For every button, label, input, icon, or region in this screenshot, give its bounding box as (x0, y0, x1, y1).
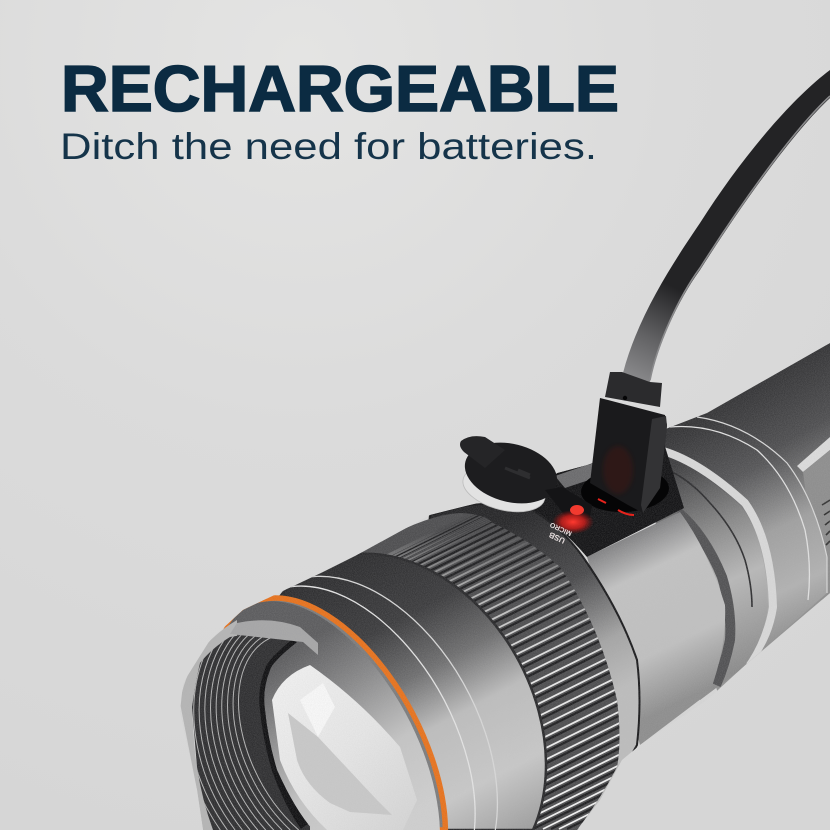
title: RECHARGEABLE (61, 52, 619, 125)
outer rim (180, 620, 237, 830)
bezel notch (230, 620, 318, 655)
charging cable (623, 70, 830, 382)
collar line outer (697, 417, 827, 593)
plug red reflection (603, 446, 633, 494)
charging indicator LED (552, 505, 594, 534)
lens (272, 665, 417, 830)
flashlight tail (666, 343, 830, 691)
plug side (641, 416, 667, 513)
port hole (580, 466, 670, 514)
knurled ring (358, 513, 620, 830)
lens highlight (300, 683, 335, 737)
threaded interior (192, 635, 310, 830)
thin dark line (672, 472, 752, 607)
rear knurl hint (822, 500, 830, 545)
cap disc black (458, 433, 564, 513)
knurl back band (428, 503, 640, 830)
head cap line inner (270, 586, 475, 830)
rubber port cap (458, 433, 592, 522)
thread shadow (264, 642, 305, 826)
cap strap (545, 487, 592, 522)
light band (663, 451, 773, 664)
red glints (598, 499, 634, 515)
subtitle: Ditch the need for batteries. (60, 126, 597, 167)
head cap line outer (312, 576, 498, 830)
collar line inner (670, 426, 809, 600)
port rim (556, 464, 592, 488)
dark groove (678, 512, 730, 685)
tail lower section (803, 450, 830, 600)
strain relief hole (623, 396, 627, 400)
micro usb label (544, 520, 573, 547)
rear collar (694, 417, 826, 700)
port recess (527, 440, 684, 557)
micro usb plug (590, 372, 667, 513)
inner section (656, 480, 768, 700)
tail highlight (797, 437, 830, 472)
micro usb label: MICRO (549, 520, 573, 537)
strain relief (605, 372, 662, 407)
mid body (587, 512, 725, 745)
front bezel (216, 601, 440, 830)
usb logo mark (505, 468, 530, 478)
flashlight (170, 340, 830, 830)
cap disc white (458, 458, 550, 520)
head cap (254, 554, 546, 830)
micro usb label: USB (547, 530, 567, 545)
orange ring (216, 598, 445, 830)
lens shadow (288, 713, 392, 815)
cap tab (460, 436, 505, 468)
metal grain (170, 340, 830, 830)
